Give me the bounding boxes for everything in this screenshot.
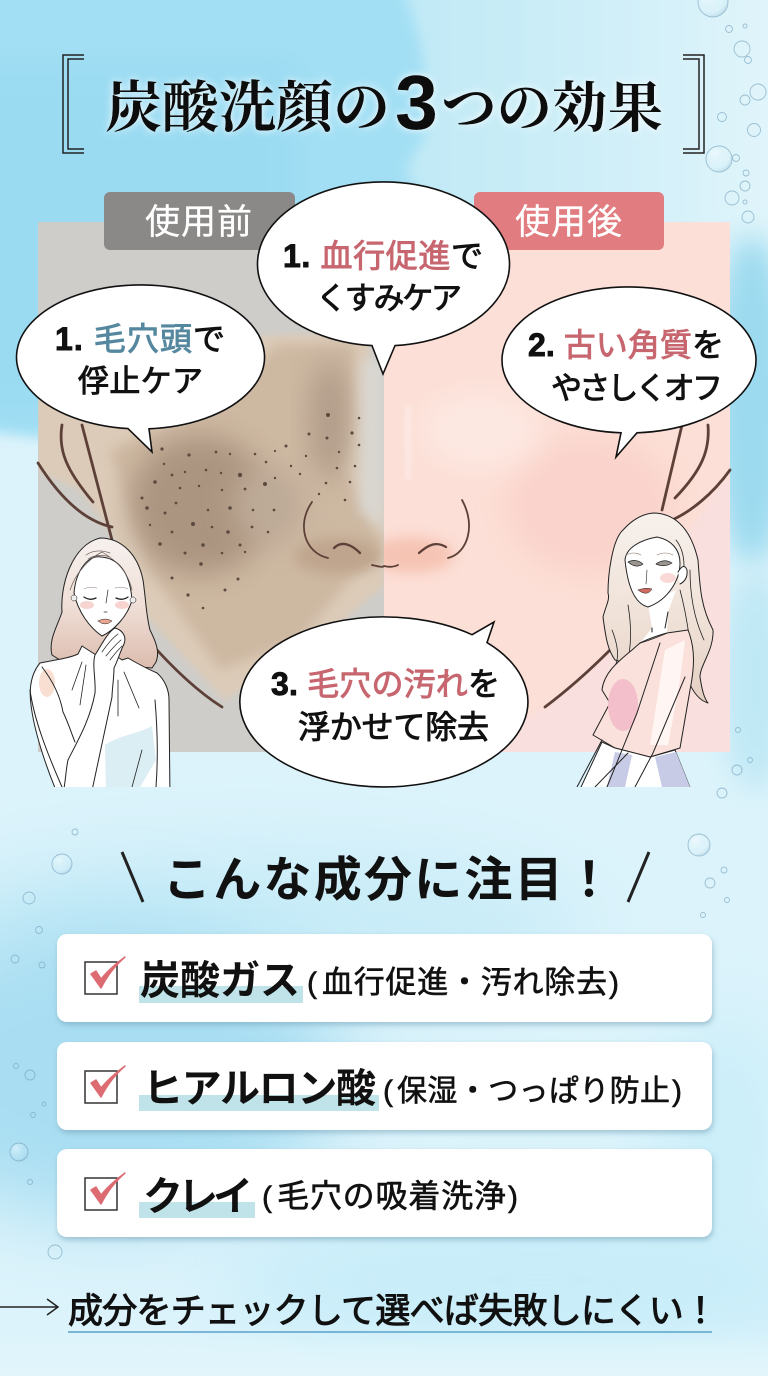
- bubble: pores: [17, 285, 265, 452]
- card: carbonic gas: (: [307, 967, 317, 1000]
- skirt: [580, 742, 690, 787]
- card: clay: [57, 1149, 712, 1237]
- panel: after skin: [370, 222, 730, 752]
- bubble: pore cleaning: 3. 毛穴の汚れを: [271, 666, 500, 702]
- card: hyaluronic acid: ): [672, 1075, 682, 1108]
- bubble: pores: 俘止ケア: [78, 364, 203, 399]
- bubble: blood flow: くすみケア: [316, 281, 462, 316]
- card: carbonic gas: 炭酸ガス: [140, 959, 300, 1003]
- face line art: before: [38, 425, 384, 707]
- face line art: after: [384, 425, 730, 707]
- highlight: [139, 1095, 379, 1111]
- label: before: [104, 192, 295, 250]
- body: [30, 646, 170, 800]
- label: after: [474, 192, 664, 250]
- bubble: pore cleaning: [240, 617, 528, 787]
- hair: [51, 538, 158, 668]
- card: clay: 毛穴の吸着洗浄: [277, 1178, 506, 1214]
- card: clay: (: [262, 1181, 272, 1214]
- card: hyaluronic acid: 保湿・つっぱり防止: [397, 1075, 670, 1108]
- highlight: [139, 1202, 255, 1218]
- bubble: pore cleaning: 浮かせて除去: [298, 709, 489, 745]
- bubble: pores: 1. 毛穴頭で: [55, 321, 225, 357]
- bubble: blood flow: [258, 182, 510, 374]
- card: carbonic gas: [57, 934, 712, 1022]
- arms and seams: [577, 612, 685, 787]
- title: [63, 55, 704, 153]
- right slash: [628, 852, 649, 902]
- title text: つの効果: [441, 78, 663, 139]
- label: before: 使用前: [145, 203, 252, 242]
- bubble: dead skin: 2. 古い角質を: [528, 327, 724, 363]
- card: carbonic gas: 血行促進・汚れ除去: [322, 965, 607, 1000]
- face: [74, 557, 132, 636]
- card: clay: ): [508, 1181, 518, 1214]
- title text: 炭酸洗顔の: [105, 78, 390, 140]
- card: carbonic gas: ): [609, 967, 619, 1000]
- title text: 3: [395, 60, 438, 146]
- blouse: [593, 630, 694, 757]
- bubble: dead skin: [502, 287, 756, 457]
- clothing tint: [608, 679, 638, 731]
- left slash: [122, 852, 143, 902]
- bubble: blood flow: 1. 血行促進で: [283, 238, 483, 274]
- heading: こんな成分に注目！: [163, 854, 613, 907]
- card: hyaluronic acid: [57, 1042, 712, 1130]
- hair: [603, 513, 713, 703]
- card: hyaluronic acid: (: [383, 1075, 393, 1108]
- arrow: [0, 1299, 58, 1315]
- conclusion text: 成分をチェックして選べば失敗しにくい！: [68, 1292, 718, 1331]
- earrings: [71, 595, 77, 601]
- highlight: [139, 986, 303, 1003]
- before / after skin panels: [38, 222, 730, 752]
- icon: checkbox: [85, 1066, 125, 1103]
- title text: [105, 60, 663, 146]
- icon: checkbox: [85, 1173, 125, 1210]
- pores: [140, 413, 360, 609]
- label: after: 使用後: [515, 203, 622, 242]
- bubble: dead skin: やさしくオフ: [551, 371, 723, 406]
- neck and face: [640, 590, 676, 643]
- ear: [678, 566, 687, 584]
- hand and arm: [62, 628, 125, 800]
- panel: before skin: [38, 222, 384, 752]
- icon: checkbox: [85, 957, 125, 994]
- card: hyaluronic acid: ヒアルロン酸: [143, 1067, 376, 1111]
- title brackets: [63, 55, 704, 153]
- clothing tint: [105, 726, 156, 787]
- card: clay: クレイ: [143, 1175, 253, 1219]
- illustration: woman after: [575, 513, 713, 800]
- illustration: woman before: [30, 538, 170, 800]
